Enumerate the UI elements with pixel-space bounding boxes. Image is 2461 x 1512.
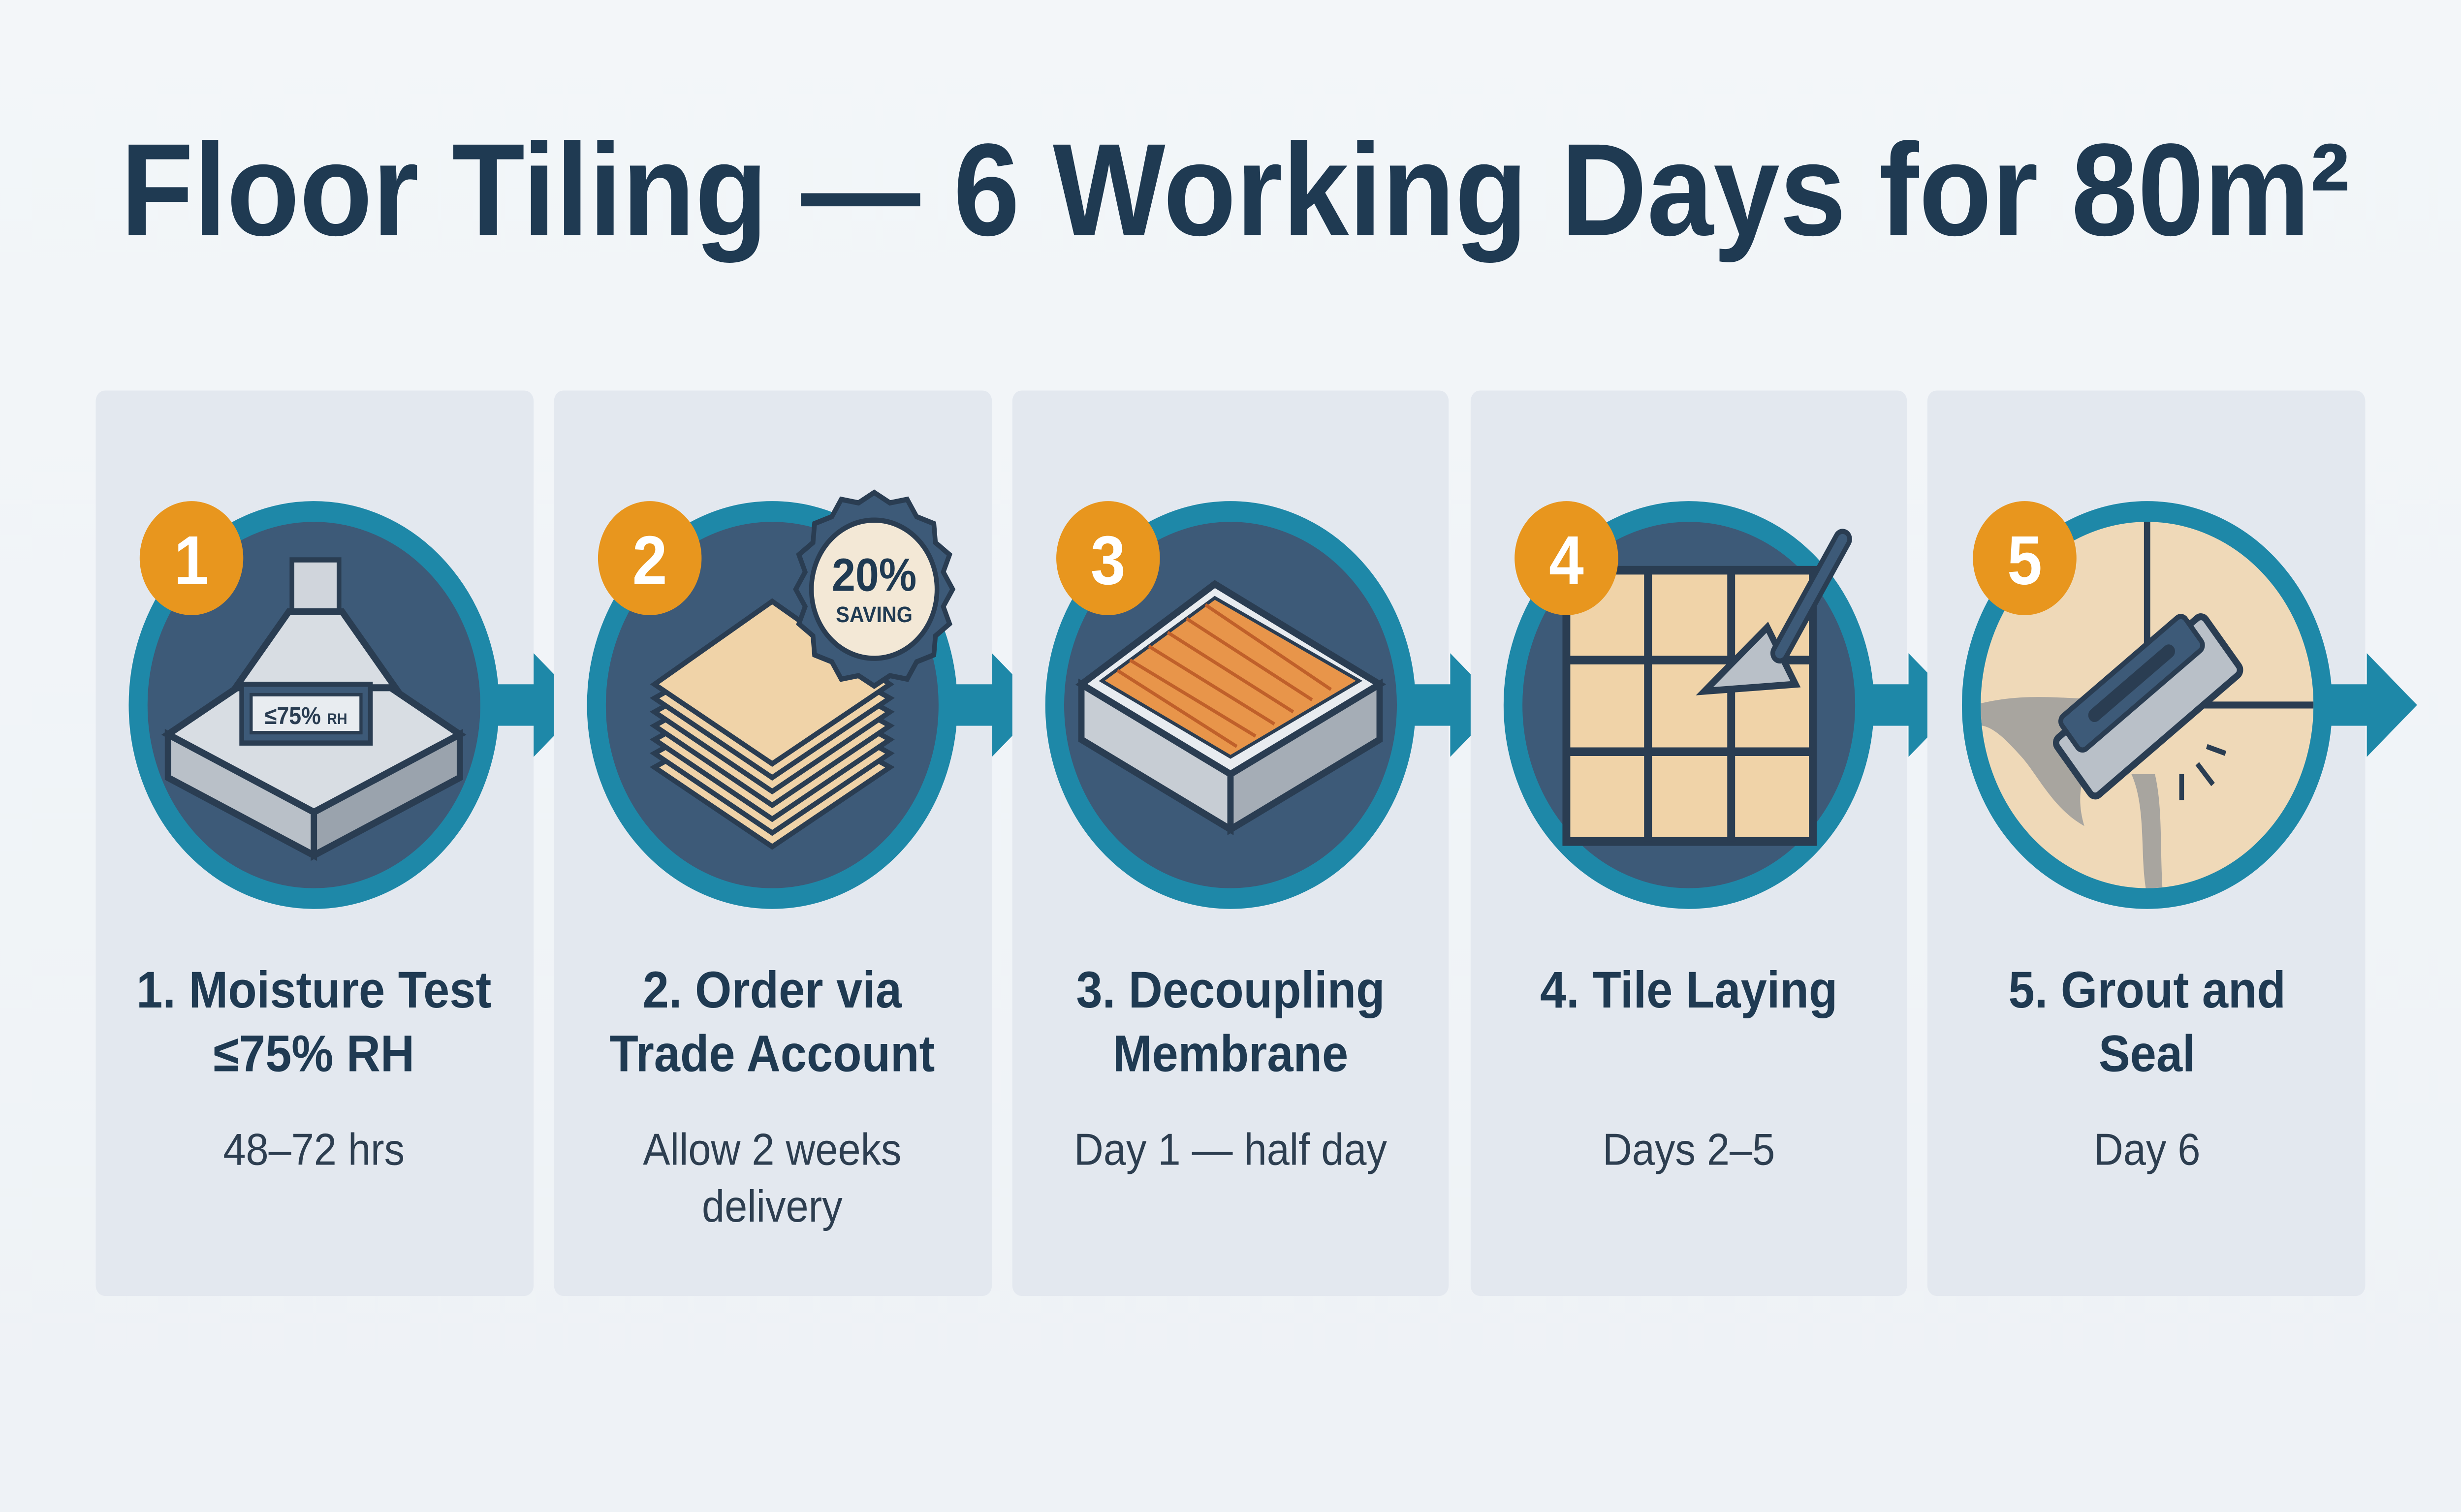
icon: saving badge: [796, 493, 953, 686]
panel 4: tile laying: [1471, 390, 1959, 1296]
arrow 1: [487, 653, 584, 757]
badge 1: [140, 501, 243, 615]
timing 1: 48–72 hrs: [223, 1125, 405, 1174]
label 4: 4. Tile Laying: [1540, 961, 1837, 1019]
label 2: 2. Order via: [643, 961, 902, 1019]
icon: grout float: [1971, 511, 2323, 899]
icon: membrane slab: [1055, 511, 1406, 899]
badge 4: [1514, 501, 1618, 615]
label 1: 1. Moisture Test: [136, 961, 491, 1019]
badge 5: [1973, 501, 2077, 615]
timing 3: Day 1 — half day: [1074, 1125, 1387, 1174]
icon: saving badge: SAVING: [836, 602, 913, 627]
timing 2: delivery: [702, 1182, 843, 1231]
label 2: Trade Account: [609, 1025, 935, 1083]
badge 2: [598, 501, 701, 615]
panel 3: membrane: [1012, 390, 1500, 1296]
panel 2: order: [554, 390, 1042, 1296]
title: Floor Tiling — 6 Working Days for 80m²: [121, 117, 2350, 263]
arrow 4: [1862, 653, 1959, 757]
panel 5: grout and seal: [1927, 390, 2417, 1296]
badge 5: 5: [2007, 522, 2042, 599]
label 2: [609, 961, 935, 1083]
label 3: [1076, 961, 1385, 1083]
badge 1: 1: [174, 522, 209, 599]
panel 1: moisture test: [96, 390, 584, 1296]
icon: tile stack: [597, 511, 948, 899]
label 3: Membrane: [1113, 1025, 1348, 1083]
arrow 2: [945, 653, 1042, 757]
badge 4: 4: [1549, 522, 1584, 599]
badge 2: 2: [632, 522, 667, 599]
label 3: 3. Decoupling: [1076, 961, 1385, 1019]
label 1: ≤75% RH: [213, 1025, 414, 1083]
icon: saving badge: 20%: [832, 549, 916, 601]
label 1: [136, 961, 491, 1083]
icon: tile grid and trowel: [1513, 511, 1864, 899]
timing 5: Day 6: [2094, 1125, 2201, 1174]
label 5: [2009, 961, 2286, 1083]
badge 3: 3: [1091, 522, 1126, 599]
timing 2: [643, 1125, 902, 1231]
arrow 3: [1403, 653, 1500, 757]
timing 4: Days 2–5: [1603, 1125, 1775, 1174]
timing 2: Allow 2 weeks: [643, 1125, 902, 1174]
label 5: 5. Grout and: [2009, 961, 2286, 1019]
icon: moisture meter on slab: [138, 511, 490, 899]
badge 3: [1056, 501, 1160, 615]
icon: moisture meter on slab: ≤75% RH: [265, 702, 347, 729]
label 5: Seal: [2099, 1025, 2196, 1083]
arrow 5: [2320, 653, 2417, 757]
